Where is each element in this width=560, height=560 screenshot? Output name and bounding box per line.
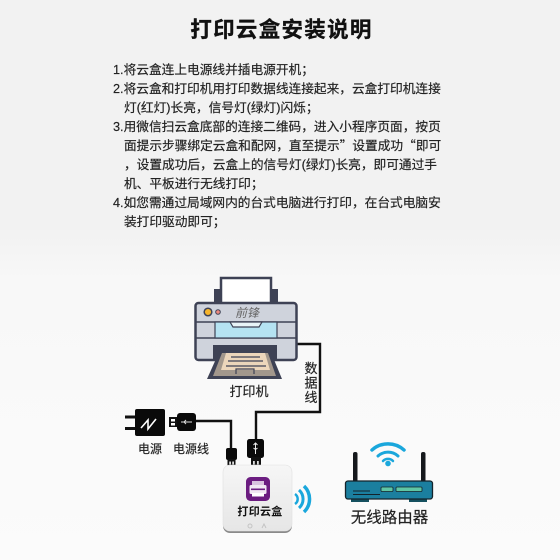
cloud box device [223,465,292,533]
data cable label: 据 [304,376,318,390]
data cable from printer to cloud box [256,344,320,440]
data cable label: 数 [304,361,318,376]
icon: router [346,452,432,502]
instructions text block: 1.将云盒连上电源线并插电源开机； [113,62,314,78]
power labels: 电源线 [173,442,209,456]
instructions text block: ，设置成功后，云盒上的信号灯(绿灯)长亮，即可通过手 [124,157,437,172]
instructions text block [113,62,441,230]
instructions text block: 3.用微信扫云盒底部的连接二维码，进入小程序页面，按页 [113,119,441,134]
instructions text block: 2.将云盒和打印机用打印数据线连接起来，云盒打印机连接 [113,81,441,96]
icon: cloud box wireless signal [295,486,310,512]
instructions text block: 面提示步骤绑定云盒和配网，直至提示”设置成功“即可 [124,135,441,154]
icon: purple printer app [246,477,270,501]
cloud box label: 打印云盒 [237,504,283,518]
printer brand logo: 前锋 [235,306,260,320]
data cable label: 线 [304,390,318,405]
printer label: 打印机 [229,384,269,399]
icon: router wifi signal [372,444,404,466]
instructions text block: 4.如您需通过局域网内的台式电脑进行打印，在台式电脑安 [113,195,441,210]
instructions text block: 机、平板进行无线打印； [124,177,264,192]
router label: 无线路由器 [351,508,429,526]
data cable label [304,361,318,405]
icon: USB connector [247,439,264,467]
icon: power adapter [125,409,165,436]
instructions text block: 灯(红灯)长亮，信号灯(绿灯)闪烁； [124,100,319,116]
power labels: 电源 [138,442,162,456]
device indicator icons [248,524,266,528]
power labels [138,442,209,456]
icon: printer [196,278,296,379]
title: 打印云盒安装说明 [190,17,373,42]
instructions text block: 装打印驱动即可； [124,215,226,230]
icon: power cable with connectors [169,413,237,466]
